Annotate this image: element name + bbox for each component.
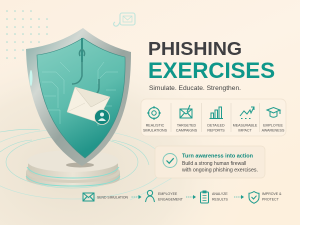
- feature: targeted campaigns: TARGETED: [177, 124, 197, 128]
- feature: detailed reports: REPORTS: [207, 128, 225, 132]
- step: send simulation: [83, 193, 128, 201]
- dot grid decoration: [6, 10, 48, 59]
- shield: [26, 28, 131, 166]
- feature: realistic simulations: [143, 106, 168, 132]
- icon: floating message bubble: [114, 13, 135, 26]
- feature: measurable impact: IMPACT: [238, 128, 252, 132]
- shield teal face: [37, 38, 125, 158]
- arrow: [186, 195, 196, 199]
- step: improve and protect: [249, 192, 282, 203]
- step: employee engagement: [146, 190, 184, 202]
- step: analyze results: ANALYZE: [212, 192, 228, 196]
- title line 1: PHISHING: [148, 38, 242, 59]
- feature: targeted campaigns: [176, 105, 198, 132]
- feature: detailed reports: [207, 107, 225, 132]
- step: analyze results: [200, 191, 229, 203]
- step: analyze results: RESULTS: [212, 198, 229, 202]
- feature: employee awareness: [262, 108, 285, 132]
- callout body: Build a strong human firewall: [182, 161, 246, 167]
- fish hook: [72, 50, 99, 95]
- callout heading: Turn awareness into action: [182, 154, 254, 160]
- circuit traces: [42, 62, 118, 126]
- step: employee engagement: EMPLOYEE: [158, 192, 178, 196]
- shield metal frame: [26, 28, 131, 166]
- title: [148, 38, 275, 83]
- icon: check circle: [163, 154, 177, 168]
- floor rings decoration: [0, 129, 172, 200]
- feature: realistic simulations: REALISTIC: [146, 124, 165, 128]
- subtitle: Simulate. Educate. Strengthen.: [149, 85, 241, 92]
- feature: measurable impact: MEASURABLE: [233, 124, 258, 128]
- callout body: with ongoing phishing exercises.: [182, 168, 258, 174]
- title line 2: EXERCISES: [148, 58, 275, 83]
- feature: realistic simulations: SIMULATIONS: [143, 128, 168, 132]
- step: send simulation: SEND SIMULATION: [97, 196, 128, 200]
- callout: [155, 146, 265, 178]
- feature: measurable impact: [233, 107, 258, 132]
- step: employee engagement: ENGAGEMENT: [158, 198, 184, 202]
- feature: employee awareness: EMPLOYEE: [263, 124, 283, 128]
- podium: [26, 150, 120, 187]
- arrow: [234, 195, 244, 199]
- arrow: [132, 195, 142, 199]
- feature: targeted campaigns: CAMPAIGNS: [176, 128, 198, 132]
- feature: employee awareness: AWARENESS: [262, 128, 285, 132]
- fishing line: [81, 38, 83, 62]
- step: improve and protect: PROTECT: [262, 198, 280, 202]
- process flow: [83, 190, 282, 203]
- feature: detailed reports: DETAILED: [207, 124, 225, 128]
- envelope user badge: [94, 110, 110, 124]
- step: improve and protect: IMPROVE &: [262, 192, 282, 196]
- panel: features: [141, 99, 286, 136]
- callout body: [182, 161, 258, 174]
- glint: [30, 70, 32, 86]
- envelope: [67, 87, 110, 122]
